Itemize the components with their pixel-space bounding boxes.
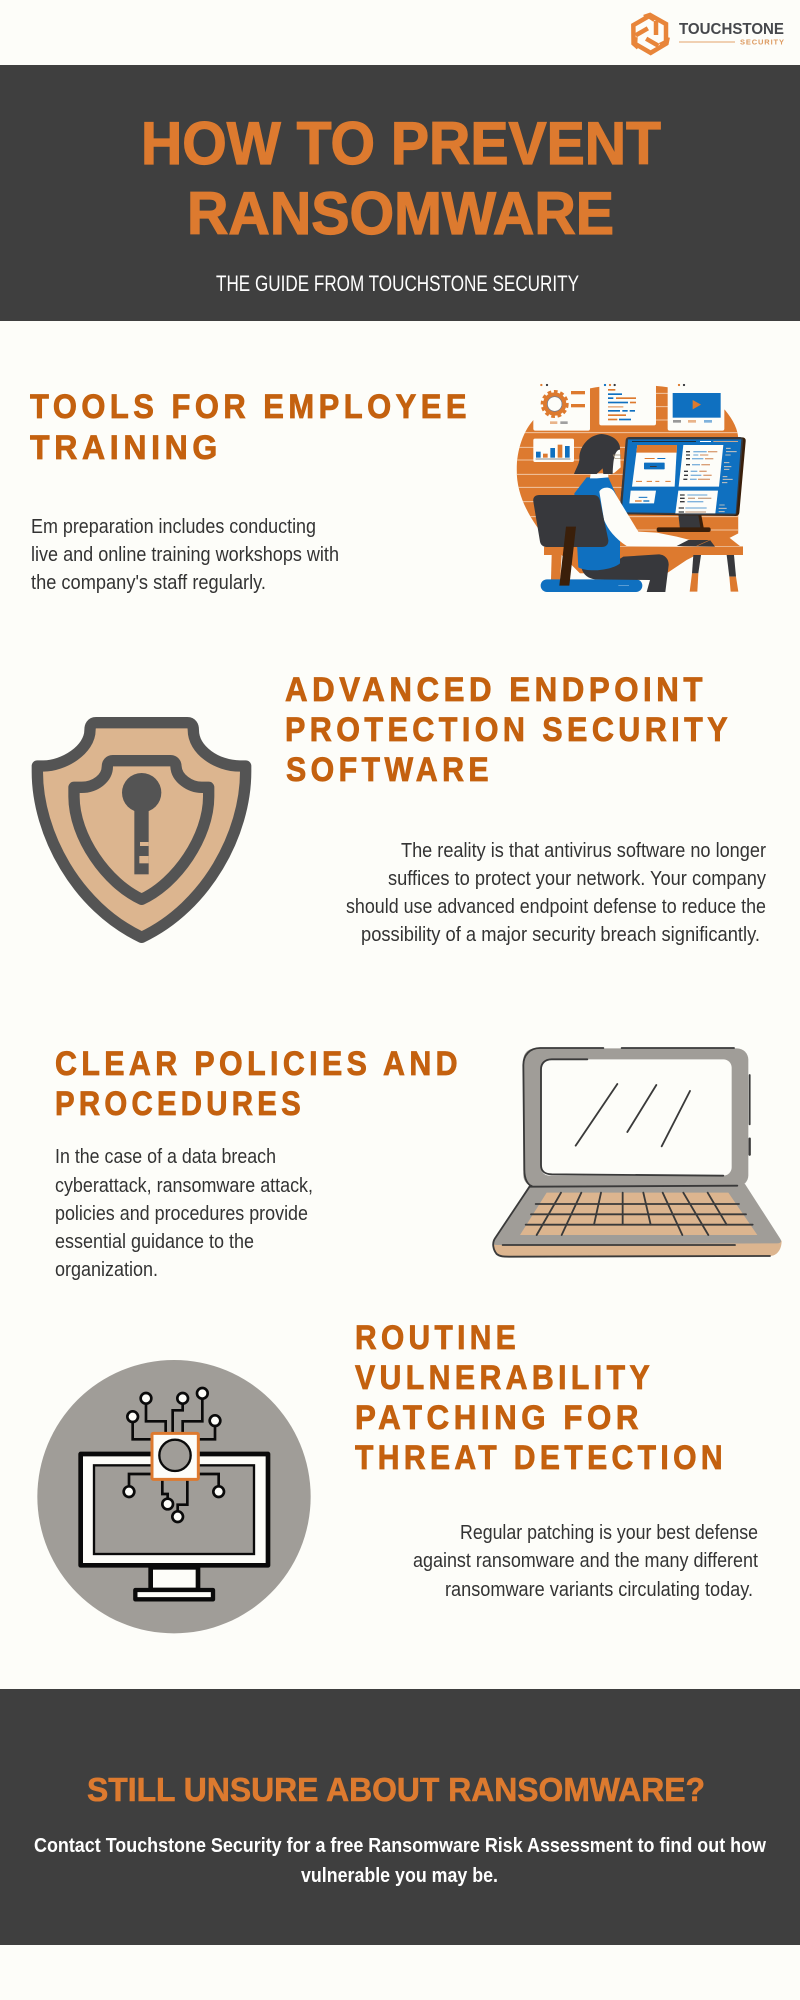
screen card right	[679, 445, 723, 487]
screen card bottom	[675, 491, 718, 513]
text block: policies body: essential guidance to the	[55, 1231, 254, 1253]
title: HOW TO PREVENT	[141, 109, 661, 177]
heading: routine vulnerability patching: THREAT DETECTION	[355, 1439, 727, 1477]
chair back and post	[533, 495, 608, 586]
subtitle: THE GUIDE FROM TOUCHSTONE SECURITY	[216, 271, 579, 296]
heading: tools for employee training: TRAINING	[30, 429, 222, 467]
vest	[574, 477, 620, 570]
footer text: vulnerable you may be.	[301, 1864, 498, 1887]
card: video	[668, 380, 724, 431]
text block: endpoint body: suffices to protect your network. Your company	[388, 868, 766, 890]
pants	[582, 554, 669, 592]
logo wordmark: TOUCHSTONE	[679, 21, 784, 38]
card: bar chart	[533, 439, 574, 462]
circuit lines	[129, 1398, 219, 1512]
orange blob with stripes	[516, 386, 738, 574]
panel: employee training	[30, 380, 747, 594]
computer monitor	[620, 437, 746, 532]
screen card left	[632, 445, 677, 487]
heading: clear policies and procedures: PROCEDURES	[55, 1085, 305, 1123]
heading: clear policies and procedures	[55, 1045, 462, 1123]
heading: routine vulnerability patching: PATCHING FOR	[355, 1399, 643, 1437]
hair	[574, 434, 620, 474]
heading: routine vulnerability patching: ROUTINE	[355, 1319, 520, 1357]
icon: laptop	[493, 1048, 782, 1257]
text block: training body: the company's staff regularly.	[31, 572, 266, 594]
title: RANSOMWARE	[187, 179, 614, 247]
footer heading: STILL UNSURE ABOUT RANSOMWARE?	[87, 1771, 705, 1808]
text block: patching body	[413, 1522, 758, 1601]
arm	[599, 488, 693, 547]
logo rule	[679, 42, 735, 43]
text block: patching body: ransomware variants circulating today.	[445, 1579, 753, 1601]
panel: policies and procedures	[55, 1045, 782, 1281]
logo: Touchstone Security	[626, 15, 784, 57]
heading: clear policies and procedures: CLEAR POLICIES AND	[55, 1045, 462, 1083]
illustration: woman at computer	[513, 380, 747, 592]
text block: endpoint body	[346, 840, 766, 946]
text block: policies body	[55, 1146, 313, 1281]
keyboard	[520, 1193, 757, 1235]
card: gear	[533, 380, 590, 431]
laptop base	[493, 1241, 782, 1257]
heading: advanced endpoint protection: PROTECTION SECURITY	[285, 711, 732, 749]
panel: vulnerability patching	[37, 1319, 758, 1633]
heading: advanced endpoint protection: ADVANCED ENDPOINT	[285, 671, 707, 709]
heading: advanced endpoint protection	[285, 671, 732, 789]
laptop outlines	[493, 1048, 770, 1257]
text block: training body: Em preparation includes conducting	[31, 516, 316, 538]
text block: policies body: policies and procedures provide	[55, 1203, 308, 1225]
card: code	[599, 380, 656, 425]
text block: training body	[31, 516, 339, 594]
chair	[541, 579, 642, 592]
text block: patching body: Regular patching is your best defense	[460, 1522, 758, 1544]
heading: advanced endpoint protection: SOFTWARE	[286, 751, 493, 789]
icon: monitor with circuit	[37, 1360, 311, 1633]
text block: endpoint body: The reality is that antivirus software no longer	[401, 840, 766, 862]
neck and face	[590, 473, 608, 478]
text block: endpoint body: possibility of a major security breach significantly.	[361, 924, 760, 946]
footer band	[0, 1689, 800, 1945]
sidebar ticks	[719, 448, 737, 512]
text block: patching body: against ransomware and the many different	[413, 1550, 758, 1572]
heading: routine vulnerability patching: VULNERABILITY	[355, 1359, 654, 1397]
text block: policies body: cyberattack, ransomware attack,	[55, 1175, 313, 1197]
text block: training body: live and online training workshops with	[31, 544, 339, 566]
keyboard	[677, 540, 715, 547]
keyhole key	[122, 773, 161, 874]
person	[574, 434, 715, 592]
glasses	[613, 455, 621, 459]
text block: policies body: In the case of a data breach	[55, 1146, 276, 1168]
laptop lid	[523, 1048, 748, 1187]
title	[141, 109, 661, 247]
screen card small	[629, 491, 656, 503]
desk	[544, 532, 743, 592]
circuit nodes	[124, 1388, 224, 1522]
heading: routine vulnerability patching	[355, 1319, 727, 1477]
central chip	[152, 1433, 198, 1479]
footer text	[34, 1834, 766, 1887]
laptop screen	[541, 1059, 732, 1176]
monitor	[81, 1454, 268, 1565]
icon: hexagon knot	[626, 15, 669, 57]
panel: endpoint protection	[37, 671, 766, 946]
heading: tools for employee training: TOOLS FOR EMPLOYEE	[30, 388, 471, 426]
header band	[0, 65, 800, 321]
heading: tools for employee training	[30, 388, 471, 467]
text block: policies body: organization.	[55, 1259, 158, 1281]
icon: shield with key	[37, 723, 246, 937]
logo subtext: SECURITY	[740, 38, 784, 46]
